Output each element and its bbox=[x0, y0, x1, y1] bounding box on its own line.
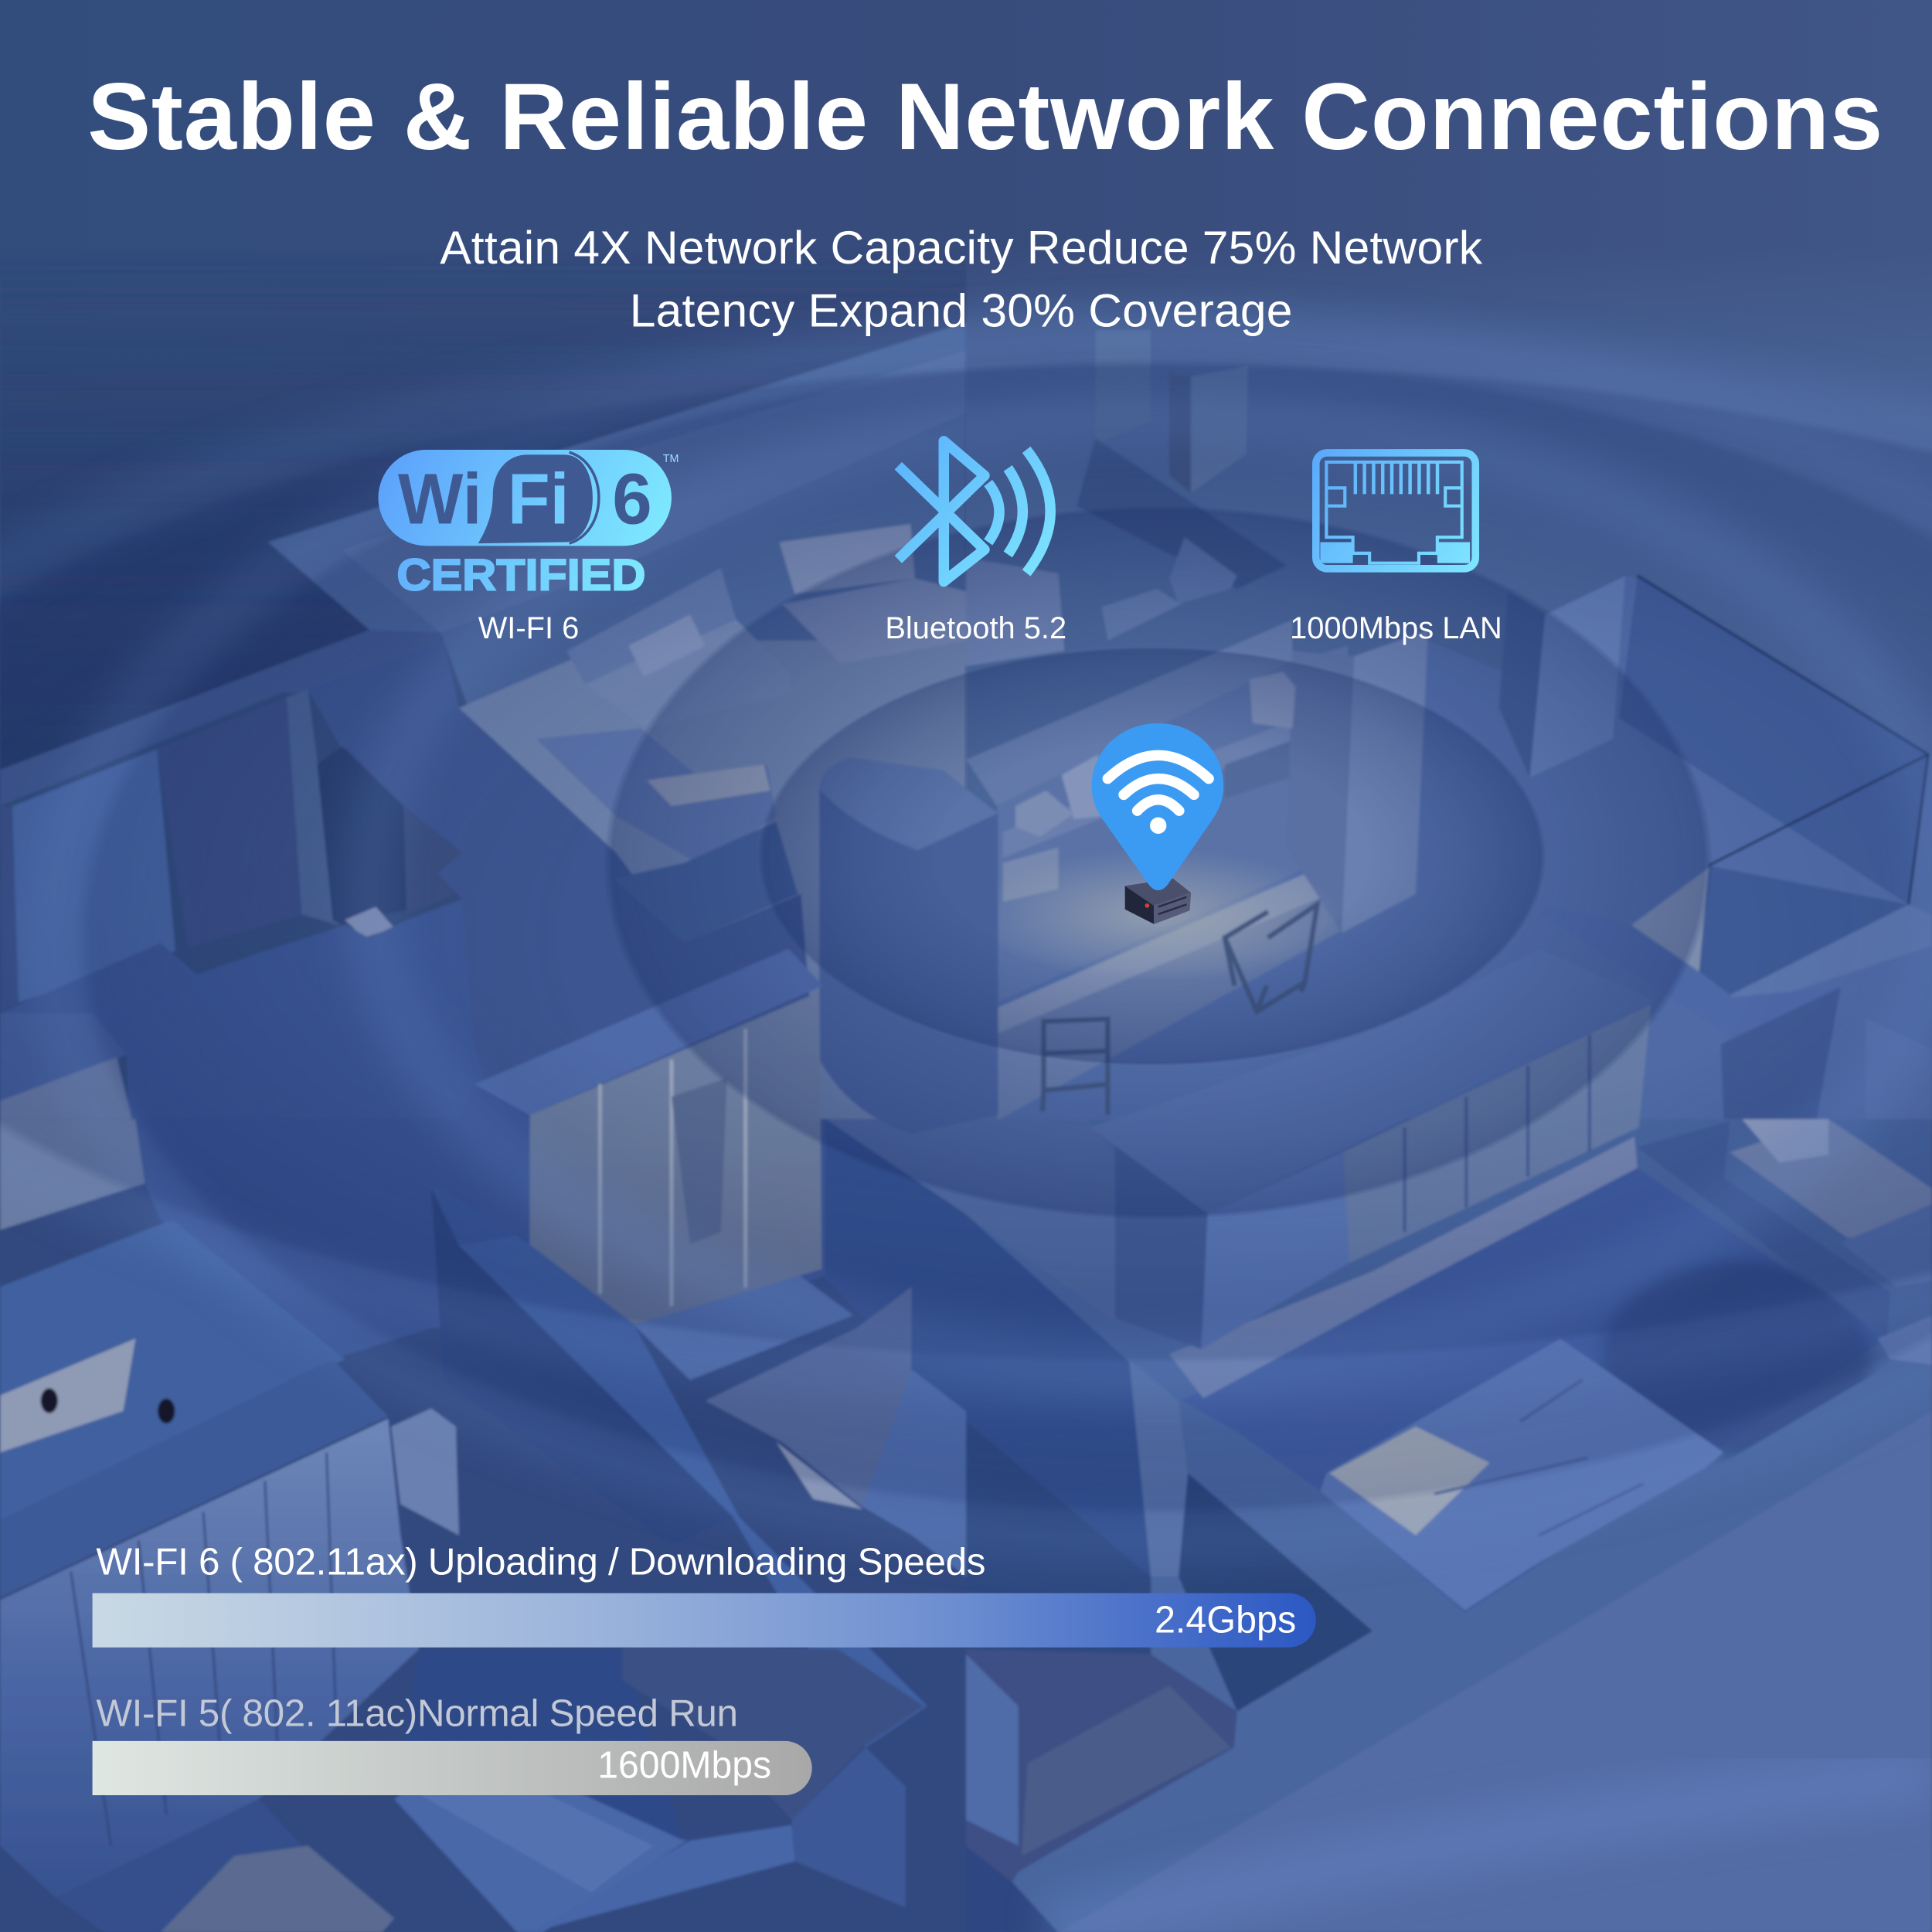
bar chart: Wi-Fi 6 speed bbox=[93, 1541, 1316, 1648]
icon: Bluetooth with signal arcs bbox=[898, 441, 1050, 582]
title: Stable & Reliable Network Connections bbox=[87, 64, 1883, 170]
wardrobe: glass closet bbox=[431, 949, 823, 1325]
scene: lower-left rooms and wardrobe bbox=[0, 1119, 966, 1932]
icon: Wi-Fi 6 certified logo: TM bbox=[663, 453, 679, 465]
scene: upper-left rooms and sofa bbox=[0, 322, 966, 1121]
bar chart: Wi-Fi 5 speed: WI-FI 5( 802. 11ac)Normal Speed Run bbox=[96, 1692, 738, 1735]
icon: mini PC bbox=[1125, 879, 1191, 924]
icon: Wi-Fi 6 certified logo: 6 bbox=[612, 459, 652, 539]
icon: Wi-Fi 6 certified logo: Fi bbox=[508, 459, 570, 539]
pillar: curved central wall bbox=[819, 758, 998, 1134]
scene: outside area at upper left bbox=[0, 0, 966, 770]
subtitle bbox=[440, 221, 1483, 337]
icon: LAN port bbox=[1316, 453, 1475, 569]
label: Bluetooth 5.2: Bluetooth 5.2 bbox=[885, 611, 1066, 645]
bar chart: Wi-Fi 5 speed bbox=[93, 1692, 812, 1795]
icon: Wi-Fi 6 certified logo bbox=[378, 450, 679, 600]
icon: Wi-Fi location pin bbox=[1092, 723, 1223, 890]
subtitle: Latency Expand 30% Coverage bbox=[630, 284, 1293, 337]
scene: upper-right study, glazed room and walls bbox=[966, 330, 1932, 1121]
furniture: desk chairs bbox=[1043, 904, 1317, 1115]
subtitle: Attain 4X Network Capacity Reduce 75% Network bbox=[440, 221, 1483, 274]
scene: lower-right storage unit, bedroom and outer walls bbox=[966, 1119, 1932, 1932]
icon: Wi-Fi 6 certified logo: Wi bbox=[398, 459, 481, 539]
label: 1000Mbps LAN: 1000Mbps LAN bbox=[1290, 611, 1502, 645]
bar chart: Wi-Fi 5 speed: 1600Mbps bbox=[597, 1744, 771, 1787]
furniture: long storage unit bbox=[1090, 949, 1655, 1349]
label: WI-FI 6: WI-FI 6 bbox=[478, 611, 579, 645]
icon: Wi-Fi 6 certified logo: CERTIFIED bbox=[396, 551, 645, 600]
bar chart: Wi-Fi 6 speed: 2.4Gbps bbox=[1155, 1599, 1296, 1641]
bar chart: Wi-Fi 6 speed: WI-FI 6 ( 802.11ax) Uploading / Downloading Speeds bbox=[96, 1541, 986, 1583]
